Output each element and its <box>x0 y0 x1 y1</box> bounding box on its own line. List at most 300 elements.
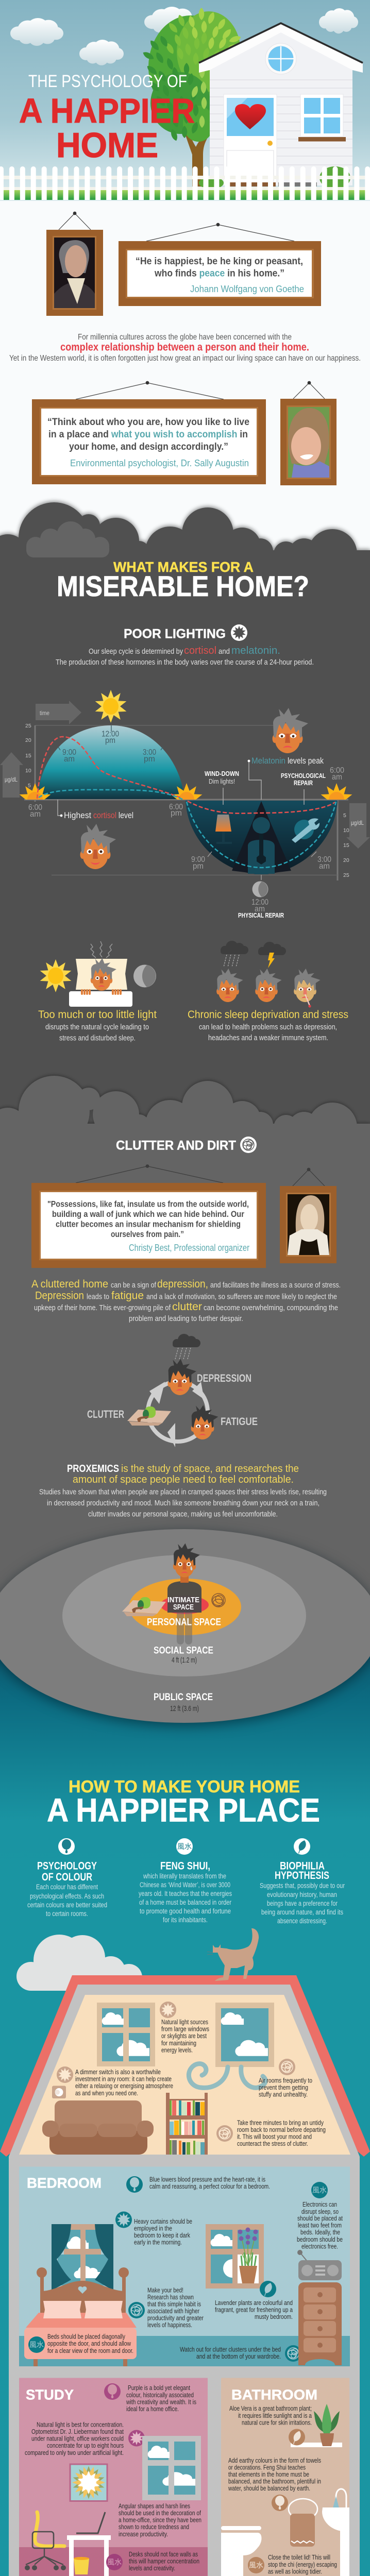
text: hormones intro: The production of these hormones in the body varies over the course of a 24-hour period. <box>56 658 314 667</box>
night bowl <box>186 801 338 874</box>
tip: purple <box>104 2383 196 2413</box>
text: air rooms: stuffy and unhealthy. <box>259 2091 308 2098</box>
text: cluttered home paragraph: Depression <box>35 1290 84 1301</box>
text: cluttered home paragraph: upkeep of their home. This ever-growing pile of <box>34 1304 171 1312</box>
time labels <box>28 766 344 913</box>
callout: wind-down: Dim lights! <box>209 777 235 785</box>
tip: natural light <box>25 2420 145 2456</box>
illustration: sleep deprivation faces <box>216 941 321 1008</box>
tip: electronics <box>297 2182 343 2250</box>
icon: brain and wrench <box>292 818 319 843</box>
tip: curtains: Heavy curtains should be <box>134 2217 192 2225</box>
text: natural light: Natural light sources <box>161 2018 208 2026</box>
text: cluttered home paragraph: and a lack of motivation, so sufferers are more likely to neglect the <box>146 1293 337 1301</box>
heading: poor lighting: POOR LIGHTING <box>124 626 226 641</box>
icon: cat on roof <box>207 1928 259 1981</box>
labels: 12 ft (3.6 m) <box>170 1704 199 1713</box>
tip: natural light: Natural light is best for concentration. <box>37 2420 124 2429</box>
text: hormones intro <box>56 645 314 667</box>
text: too much or too little light: Too much or too little light <box>38 1009 157 1021</box>
tip: electronics: should be placed at <box>297 2214 343 2222</box>
quote frame: Augustin: in a place and what you wish to accomplish in <box>48 429 248 440</box>
icon: dresser <box>298 2282 342 2365</box>
quote frame: Christy Best: clutter becomes an insular mechanism for shielding <box>56 1219 241 1229</box>
icon: toilet <box>221 2526 262 2576</box>
tip: make your bed <box>128 2286 204 2329</box>
text: hormones intro: cortisol <box>184 645 216 656</box>
social space zone <box>62 1555 306 1676</box>
icon: fatigue face <box>191 1405 218 1439</box>
quote frame: Augustin: “Think about who you are, how you like to live <box>47 417 249 428</box>
text: three minutes: it. This will boost your mood and <box>237 2133 312 2140</box>
column: biophilia hypothesis: being around nature, and find its <box>261 1908 343 1916</box>
column: psychology of colour <box>27 1838 107 1918</box>
text: cluttered home paragraph: problem and leading to further despair. <box>129 1315 243 1323</box>
text: three minutes: Take three minutes to bring an untidy <box>237 2119 324 2127</box>
tip: purple: colour, historically associated <box>126 2391 194 2399</box>
labels: PUBLIC SPACE <box>154 1692 213 1703</box>
icon: moon and physical repair: PHYSICAL REPAIR <box>238 911 284 919</box>
text: dimmer switch: investment in any room: it can help create <box>75 2075 172 2082</box>
tip: purple: with creativity and wealth. It is <box>126 2398 196 2406</box>
red dashed cortisol curve <box>37 737 335 814</box>
icon: depression face <box>167 1359 196 1395</box>
personal space zone <box>129 1579 241 1635</box>
callout: melatonin peak: Melatonin <box>251 756 285 766</box>
icon: window with lavender <box>206 2224 264 2289</box>
time labels: 6:00 <box>330 766 344 775</box>
text: chronic sleep deprivation: Chronic sleep deprivation and stress <box>188 1009 348 1021</box>
day ticks and times <box>58 725 163 764</box>
column: psychology of colour: Each colour has different <box>36 1883 98 1891</box>
label: clutter: CLUTTER <box>87 1409 124 1420</box>
house <box>199 23 363 185</box>
labels: SOCIAL SPACE <box>154 1646 213 1656</box>
heading: BATHROOM <box>231 2386 317 2403</box>
icon: radio <box>297 2250 342 2280</box>
text: chronic sleep deprivation: headaches and a weaker immune system. <box>208 1034 328 1042</box>
tip: aloe vera: Aloe Vera is a great bathroom plant; <box>229 2404 312 2412</box>
day ticks and times: 12:00 <box>102 730 119 739</box>
day ticks and times: 9:00 <box>62 748 76 757</box>
tip: desks: 風水 <box>107 2558 122 2566</box>
tip: make your bed: that this simple habit is <box>147 2300 201 2308</box>
icon: bin <box>74 2557 89 2574</box>
title <box>19 72 195 165</box>
attic room <box>19 1995 350 2155</box>
y labels day: 15 <box>25 753 31 759</box>
text: proxemics <box>39 1463 327 1519</box>
y labels night <box>343 812 349 878</box>
sky <box>0 0 370 201</box>
tip: lavender: musty bedroom. <box>255 2313 293 2320</box>
callout: wind-down: WIND-DOWN <box>205 770 239 777</box>
column: biophilia hypothesis: Suggests that, possibly due to our <box>260 1882 345 1890</box>
tip: electronics: beds. Ideally, the <box>300 2228 340 2236</box>
labels: 4 ft (1.2 m) <box>172 1656 197 1665</box>
tip: angular shapes: increase productivity. <box>119 2530 168 2538</box>
tip: electronics: least two feet from <box>298 2222 342 2229</box>
icon: aloe plant <box>291 2404 342 2447</box>
tip: toilet lid: Close the toilet lid! This will <box>268 2553 330 2561</box>
callout: melatonin peak: levels peak <box>288 756 324 766</box>
quote frame: Augustin: your home, and design accordingly.” <box>69 442 228 452</box>
icon: drop badge <box>272 2495 288 2511</box>
y labels day <box>25 723 31 789</box>
quote frame: Christy Best <box>31 1164 266 1268</box>
day ticks and times: 3:00 <box>143 748 156 757</box>
text: cluttered home paragraph: leads to <box>87 1293 109 1301</box>
tip: bed placement: opposite the door, and should allow <box>47 2340 131 2347</box>
callout: highest cortisol: Highest <box>64 810 91 820</box>
panel: bathroom <box>221 2378 349 2576</box>
tip: clutter clusters: Watch out for clutter clusters under the bed <box>180 2345 281 2353</box>
panel: miserable home background with cloud edge <box>0 502 370 1127</box>
icon: air swirls <box>189 2064 265 2088</box>
time labels: am <box>332 773 342 782</box>
y labels night: 10 <box>343 827 349 834</box>
axes <box>24 725 348 880</box>
attic window right <box>215 2003 274 2067</box>
text: dimmer switch: A dimmer switch is also a worthwhile <box>75 2068 161 2076</box>
arrow: time <box>36 701 81 724</box>
labels <box>147 1596 221 1713</box>
text: dimmer switch: as and when you need one. <box>75 2089 138 2097</box>
tip: angular shapes: Angular shapes and harsh lines <box>119 2502 190 2510</box>
panel: hero <box>0 0 370 201</box>
day ticks and times: pm <box>144 755 155 764</box>
door with heart <box>224 94 277 185</box>
tip: blue <box>126 2175 270 2193</box>
heading: BEDROOM <box>27 2175 102 2191</box>
text: proxemics: PROXEMICS <box>67 1463 119 1475</box>
intro text: complex relationship between a person and their home. <box>60 341 309 353</box>
text: cluttered home paragraph: clutter <box>172 1301 202 1313</box>
text: dimmer switch: either a relaxing or energising atmosphere <box>75 2082 173 2090</box>
text: too much or too little light: stress and disturbed sleep. <box>59 1035 136 1043</box>
heading: happier place: A HAPPIER PLACE <box>47 1792 320 1829</box>
icon: moon and physical repair <box>238 881 284 919</box>
chart: hormone levels over 24 hours <box>0 690 370 919</box>
icon: desk and laptop <box>67 2512 111 2576</box>
blue dashed melatonin curve <box>39 790 336 868</box>
heading: happier place: HOW TO MAKE YOUR HOME <box>69 1777 300 1796</box>
text: cluttered home paragraph: and facilitates the illness as a source of stress. <box>210 1281 341 1290</box>
text: proxemics: clutter invades our personal space, making us feel uncomfortable. <box>88 1511 278 1519</box>
icon: rain cloud <box>173 1334 200 1359</box>
tip: make your bed: levels of happiness. <box>147 2321 192 2329</box>
icon: oval window <box>265 43 296 74</box>
tip: electronics: disrupt sleep, so <box>301 2208 339 2215</box>
text: natural light: for maintaining <box>161 2039 196 2047</box>
public space zone <box>0 1529 370 1723</box>
icon: lamp <box>215 815 232 844</box>
text: dimmer switch <box>52 2066 173 2098</box>
text: three minutes <box>216 2119 326 2147</box>
tip: aloe vera <box>229 2404 312 2427</box>
column: biophilia hypothesis: absence distressing. <box>277 1917 327 1925</box>
y labels day: 25 <box>25 723 31 729</box>
callout: highest cortisol <box>58 800 133 820</box>
day dome <box>37 725 184 799</box>
callout: psychological repair <box>281 772 326 805</box>
tip: curtains <box>115 2211 192 2246</box>
text: proxemics: in decreased productivity and mood. Much like someone breathing down your neck on a train, <box>47 1499 319 1507</box>
icon: body repair <box>248 817 275 874</box>
tip: earthy colours: water, should be balanced by earth. <box>228 2484 310 2492</box>
panel: teal happy section background <box>0 1607 370 2576</box>
icon: office chair <box>25 2512 66 2570</box>
tip: purple: Purple is a bold yet elegant <box>128 2384 190 2392</box>
house: main outline <box>0 1975 370 2576</box>
tip: lavender: fragrant, great for freshening up a <box>215 2306 293 2313</box>
quote frame: Augustin: Environmental psychologist, Dr. Sally Augustin <box>70 458 249 468</box>
text: air rooms: prevent them getting <box>259 2083 308 2091</box>
icon: starburst artwork <box>69 2462 109 2503</box>
quote frame: Goethe: Johann Wolfgang von Goethe <box>190 284 304 294</box>
icon: noon sun <box>95 690 126 723</box>
icon: clutter box <box>122 1597 166 1616</box>
tip: desks: levels and creativity. <box>129 2564 175 2572</box>
day ticks and times: pm <box>105 736 115 745</box>
quote frame: Christy Best: Christy Best, Professional organizer <box>129 1243 249 1253</box>
title: A HAPPIER <box>19 92 195 130</box>
title: HOME <box>56 126 158 165</box>
tip: electronics: 風水 <box>312 2186 327 2194</box>
column: feng shui: which literally translates from the <box>143 1872 226 1880</box>
panel: clutter section background with cloud edge <box>0 1076 370 1647</box>
column: psychology of colour: PSYCHOLOGY <box>37 1860 97 1872</box>
icon: sofa <box>42 2100 154 2155</box>
tip: bed placement <box>28 2333 133 2354</box>
tip: earthy colours: that elements in the home must be <box>228 2470 309 2478</box>
text: cluttered home paragraph: can be a sign of <box>111 1281 157 1290</box>
diagram: proxemics zones <box>0 1529 370 1723</box>
time labels: 6:00 <box>28 803 42 812</box>
time labels: 9:00 <box>191 855 205 864</box>
fence and grass <box>0 166 370 200</box>
icon: study window <box>142 2436 201 2500</box>
tip: blue: calm and reassuring, a perfect colour for a bedroom. <box>149 2182 270 2190</box>
day ticks and times: am <box>64 755 75 764</box>
tip: aloe vera: natural cure for skin irritations. <box>242 2418 312 2427</box>
portrait frame: Goethe <box>46 212 103 316</box>
text: hormones intro: and <box>218 648 230 656</box>
text: hormones intro: melatonin. <box>231 645 280 656</box>
tip: blue: Blue lowers blood pressure and the heart-rate, it is <box>149 2175 265 2183</box>
attic window left <box>97 2003 155 2066</box>
column: biophilia hypothesis: HYPOTHESIS <box>275 1870 329 1882</box>
heat lines <box>91 941 112 958</box>
labels: PERSONAL SPACE <box>147 1617 221 1628</box>
quote frame: Christy Best: "Possessions, like fat, insulate us from the outside world, <box>47 1199 249 1209</box>
roof <box>0 1975 370 2157</box>
icon: clutter box <box>127 1406 171 1426</box>
icon: tired face <box>272 708 308 753</box>
intro text: For millennia cultures across the globe have been concerned with the <box>78 333 292 342</box>
callout: melatonin peak <box>248 756 324 800</box>
icon: towel ring <box>289 2499 317 2547</box>
column: psychology of colour: psychological effects. As such <box>30 1892 104 1900</box>
tree <box>142 8 242 187</box>
callout: highest cortisol: level <box>116 810 133 820</box>
text: three minutes: counteract the stress of clutter. <box>237 2140 308 2147</box>
y labels night: 20 <box>343 857 349 863</box>
y labels night: 25 <box>343 872 349 878</box>
tip: clutter clusters <box>180 2345 301 2362</box>
tip: angular shapes <box>119 2502 201 2538</box>
arrow: unit up <box>0 752 23 798</box>
time labels: pm <box>193 862 204 871</box>
column: psychology of colour: certain colours are better suited <box>27 1901 107 1909</box>
heading: miserable home: WHAT MAKES FOR A <box>113 559 254 575</box>
time labels: 3:00 <box>317 855 331 864</box>
column: feng shui: to promote good health and fortune <box>140 1907 231 1915</box>
quote frame: Christy Best: ourselves from pain.” <box>111 1229 184 1239</box>
icon: curtained window <box>52 2224 113 2291</box>
text: proxemics: Studies have shown that when people are placed in cramped spaces their stress levels rise, resulting <box>39 1488 327 1496</box>
tip: bed placement: for a clear view of the room and door. <box>47 2347 133 2354</box>
icon: leaf badge <box>289 2429 305 2445</box>
column: biophilia hypothesis: beings have a preference for <box>267 1900 338 1907</box>
icon: dimmer <box>52 2086 66 2098</box>
tip: angular shapes: a home-office, since they have been <box>119 2516 201 2523</box>
y labels night: 5 <box>343 812 346 819</box>
heading: STUDY <box>26 2386 74 2403</box>
tip: natural light: under natural light, office workers could <box>31 2435 124 2442</box>
tip: toilet lid: 風水 <box>249 2561 263 2569</box>
text: cluttered home paragraph: depression, <box>157 1278 208 1290</box>
panel: bedroom <box>19 2167 350 2366</box>
icon: sink and tap <box>322 2489 349 2576</box>
tip: desks: this will hamper concentration <box>129 2557 199 2565</box>
window right <box>298 94 346 141</box>
arrow: unit up: µg/dL <box>5 776 18 783</box>
tip: natural light: Optometrist Dr. J. Lieberman found that <box>31 2428 124 2435</box>
y labels night: 15 <box>343 842 349 849</box>
callout: highest cortisol: cortisol <box>91 810 116 820</box>
column: psychology of colour: to certain rooms. <box>46 1910 88 1918</box>
text: air rooms: Air rooms frequently to <box>259 2076 312 2084</box>
text: chronic sleep deprivation <box>188 1009 348 1042</box>
icon: tangle <box>212 1594 225 1607</box>
arrow: time: time <box>40 709 49 717</box>
tip: desks: Desks should not face walls as <box>129 2550 198 2558</box>
tip: angular shapes: should be used in the decoration of <box>119 2509 201 2517</box>
text: cluttered home paragraph: can become overwhelming, compounding the <box>204 1304 338 1312</box>
column: biophilia hypothesis: evolutionary history, human <box>267 1891 337 1899</box>
teal gradient <box>0 1607 370 1875</box>
column: feng shui: 風水 <box>177 1842 192 1851</box>
text: natural light: or skylights are best <box>161 2032 207 2040</box>
portrait frame: Augustin <box>280 381 337 485</box>
time labels: pm <box>171 809 182 818</box>
blanket <box>69 991 132 1007</box>
pillow <box>76 959 127 990</box>
tip: natural light: concentrate for up to eight hours <box>47 2442 124 2449</box>
text: air rooms <box>259 2059 312 2098</box>
column: feng shui: years old. It teaches that the energies <box>139 1890 232 1897</box>
quote frame: Goethe: “He is happiest, be he king or peasant, <box>136 256 303 267</box>
tip: make your bed: Research has shown <box>147 2293 194 2301</box>
tip: lavender <box>215 2281 293 2320</box>
heading: happier place <box>47 1777 320 1829</box>
text: proxemics: amount of space people need to feel comfortable. <box>73 1473 294 1485</box>
quote frame: Augustin <box>32 381 266 484</box>
arrow: unit down: µg/dL <box>351 819 364 826</box>
text: three minutes: room back to normal before departing <box>237 2126 326 2133</box>
time labels: 6:00 <box>169 803 183 811</box>
icon: bookshelf <box>166 2093 208 2155</box>
tip: bed placement: 風水 <box>29 2341 44 2349</box>
quote frame: Christy Best: building a wall of junk which we can hide behind. Our <box>52 1209 244 1219</box>
column: psychology of colour: OF COLOUR <box>42 1871 92 1883</box>
text: natural light: from large windows <box>161 2025 209 2033</box>
callout: wind-down <box>205 770 239 805</box>
column: feng shui <box>139 1838 232 1924</box>
column: feng shui: Chinese as ‘Wind Water’, is over 3000 <box>140 1881 230 1889</box>
tip: natural light: compared to only two under artificial light. <box>25 2449 124 2456</box>
time labels: 12:00 <box>251 898 268 907</box>
tip: angular shapes: shown to reduce tiredness and <box>119 2523 189 2531</box>
icon: bed <box>24 2267 137 2366</box>
column: feng shui: for its inhabitants. <box>163 1916 208 1924</box>
column: feng shui: FENG SHUI, <box>160 1860 210 1872</box>
intro text <box>9 333 361 363</box>
labels: SPACE <box>173 1603 194 1612</box>
icon: alert face <box>80 824 116 869</box>
panel: study <box>19 2378 208 2576</box>
text: natural light <box>160 2002 209 2054</box>
text: cluttered home paragraph: fatigue <box>111 1290 144 1301</box>
tip: toilet lid: stop the chi (energy) escaping <box>268 2561 337 2568</box>
title: THE PSYCHOLOGY OF <box>28 72 187 91</box>
callout: psychological repair: PSYCHOLOGICAL <box>281 772 326 779</box>
tip: electronics: bedroom should be <box>297 2235 343 2243</box>
tip: earthy colours: or decorations. Feng Shui teaches <box>228 2464 306 2471</box>
lighter inner cloud <box>26 521 109 557</box>
label: fatigue: FATIGUE <box>221 1416 258 1428</box>
y labels day: 10 <box>25 768 31 774</box>
heading: clutter and dirt: CLUTTER AND DIRT <box>116 1139 236 1153</box>
tip: earthy colours: balanced, and the bathroom, plentiful in <box>228 2477 321 2485</box>
time labels: am <box>319 862 330 871</box>
column: biophilia hypothesis <box>260 1838 345 1925</box>
text: natural light: energy levels. <box>161 2046 193 2054</box>
clouds <box>10 7 358 65</box>
text: hormones intro: Our sleep cycle is determined by <box>89 648 183 656</box>
column: biophilia hypothesis: BIOPHILIA <box>280 1860 325 1872</box>
y labels day: 20 <box>25 737 31 743</box>
tip: make your bed: associated with higher <box>147 2307 200 2315</box>
quote frame: Goethe <box>119 223 321 306</box>
callout: psychological repair: REPAIR <box>294 779 313 787</box>
tip: lavender: Lavender plants are colourful and <box>215 2299 293 2307</box>
heading: miserable home: MISERABLE HOME? <box>57 570 309 602</box>
heading: miserable home <box>57 559 309 602</box>
tip: earthy colours <box>228 2456 321 2492</box>
icon: horizon suns <box>20 783 352 800</box>
icon: big cloud <box>16 1935 142 1991</box>
diagram: depression fatigue clutter cycle <box>87 1334 258 1447</box>
text: too much or too little light: disrupts the natural cycle leading to <box>45 1023 149 1031</box>
text: cluttered home paragraph: A cluttered home <box>31 1278 108 1290</box>
tip: make your bed: Make your bed! <box>147 2286 183 2294</box>
tip: curtains: early in the morning. <box>134 2238 182 2246</box>
time labels: am <box>30 810 41 819</box>
tip: desks <box>106 2550 199 2572</box>
tip: toilet lid: as well as looking tidier. <box>268 2568 322 2575</box>
